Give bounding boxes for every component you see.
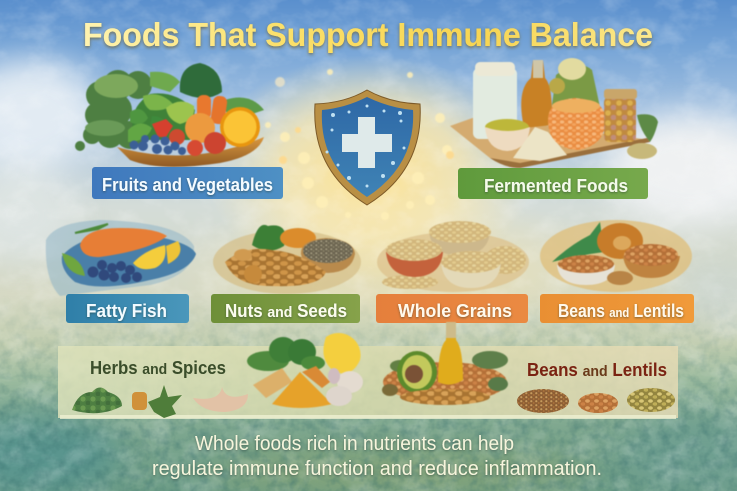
title: Foods That Support Immune Balance <box>83 16 653 53</box>
label: fruits and vegetables <box>92 167 283 199</box>
icon: shield with cross <box>315 90 420 205</box>
label: beans and lentils <box>540 294 694 323</box>
illustration: ginger, turmeric, basil and lemon <box>247 333 363 408</box>
label: fermented foods <box>458 168 648 199</box>
illustration: fermented foods on board <box>450 58 658 168</box>
label: beans and lentils: Beans and Lentils <box>558 301 684 321</box>
caption: Whole foods rich in nutrients can help <box>195 433 514 455</box>
label: whole grains: Whole Grains <box>398 301 512 321</box>
label: nuts and seeds <box>211 294 360 323</box>
panel: herbs, healthy fats and legumes band <box>58 322 678 419</box>
label: fermented foods: Fermented Foods <box>484 176 628 196</box>
illustration: nuts and seeds <box>213 225 361 294</box>
icon: lentil pile <box>517 389 569 413</box>
label: fatty fish <box>66 294 189 323</box>
caption <box>152 433 602 480</box>
icon: dried herbs <box>72 388 122 413</box>
icon: garlic cloves <box>193 387 248 412</box>
icon: mixed bean pile <box>578 393 618 413</box>
label: whole grains <box>376 294 528 323</box>
heading: beans and lentils: Beans and Lentils <box>527 360 667 380</box>
icon: cinnamon piece <box>132 392 147 410</box>
icon: green leaf sprig <box>148 385 182 418</box>
label: fruits and vegetables: Fruits and Vegetables <box>102 175 273 195</box>
illustration: fatty fish plate <box>46 220 196 296</box>
icon: chickpea pile <box>627 388 675 412</box>
illustration: fruits and vegetables bowl <box>75 63 264 167</box>
label: fatty fish: Fatty Fish <box>86 301 167 321</box>
illustration: avocado, olive oil and nuts <box>382 322 508 405</box>
glowing orbs around shield <box>265 69 454 220</box>
label: nuts and seeds: Nuts and Seeds <box>225 301 347 321</box>
illustration: beans and lentils bowls <box>540 220 692 292</box>
illustration: whole grains bowls <box>377 221 529 292</box>
caption: regulate immune function and reduce inflammation. <box>152 458 602 480</box>
heading: herbs and spices: Herbs and Spices <box>90 358 226 378</box>
